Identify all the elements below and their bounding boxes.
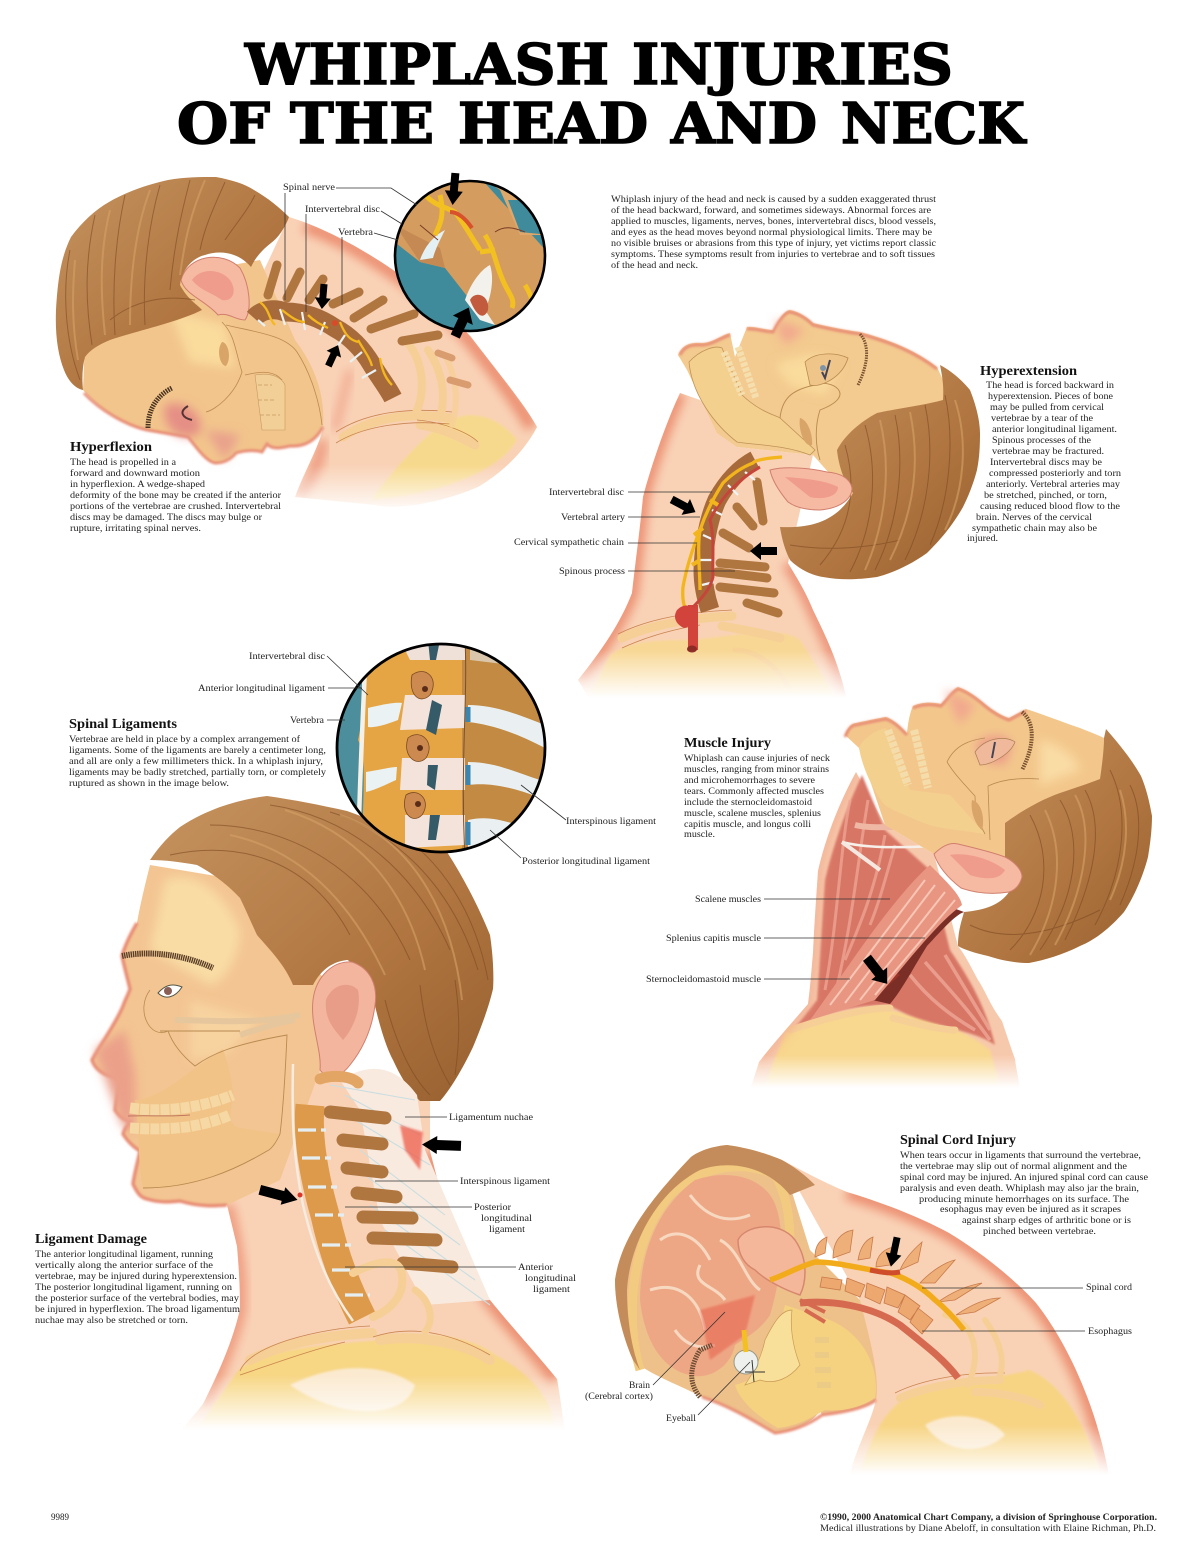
labels: spinal ligaments: Intervertebral disc bbox=[249, 651, 325, 662]
text block: ligament damage: vertebrae, may be injured during hyperextension. bbox=[35, 1271, 237, 1282]
title bbox=[177, 32, 1027, 157]
text block: hyperflexion: deformity of the bone may be created if the anterior bbox=[70, 490, 282, 501]
text block: muscle injury: and microhemorrhages to severe bbox=[684, 775, 815, 786]
labels: ligament damage bbox=[449, 1112, 576, 1295]
text block: hyperflexion: rupture, irritating spinal nerves. bbox=[70, 523, 201, 534]
heading: spinal ligaments: Spinal Ligaments bbox=[69, 716, 177, 731]
copyright credit bbox=[820, 1512, 1157, 1534]
labels: hyperflexion: Spinal nerve bbox=[283, 182, 335, 193]
skull lines bbox=[206, 322, 322, 425]
arrows bbox=[667, 491, 700, 520]
leader lines: muscle injury bbox=[764, 899, 925, 979]
eye and brow bbox=[158, 985, 182, 997]
text block: hyperextension: The head is forced backward in bbox=[986, 380, 1114, 391]
panel: spinal cord injury illustration bbox=[615, 1145, 1109, 1475]
text block: introduction: of the head and neck. bbox=[611, 260, 698, 271]
text block: hyperextension: injured. bbox=[967, 533, 998, 544]
face skin and skull bbox=[92, 865, 350, 1206]
labels: ligament damage: ligament bbox=[489, 1224, 525, 1235]
labels: ligament damage: Anterior bbox=[518, 1262, 554, 1273]
text block: hyperextension: anterior longitudinal ligament. bbox=[992, 424, 1117, 435]
text block: spinal cord injury: the vertebrae may slip out of normal alignment and the bbox=[900, 1161, 1127, 1172]
ear bbox=[934, 843, 1022, 893]
text block: hyperflexion: The head is propelled in a bbox=[70, 457, 177, 468]
ear bbox=[181, 257, 249, 320]
text block: hyperextension: compressed posteriorly and torn bbox=[989, 468, 1121, 479]
text block: spinal ligaments: ruptured as shown in the image below. bbox=[69, 778, 229, 789]
panel: hyperflexion illustration bbox=[56, 170, 550, 507]
labels: spinal cord injury: (Cerebral cortex) bbox=[585, 1391, 653, 1402]
neck and chest skin bbox=[180, 1060, 565, 1432]
heading: muscle injury: Muscle Injury bbox=[684, 735, 771, 750]
text block: hyperextension: anteriorly. Vertebral arteries may bbox=[986, 479, 1120, 490]
vertebrae column bbox=[717, 482, 778, 613]
labels: spinal ligaments: Interspinous ligament bbox=[566, 816, 656, 827]
leader lines: hyperextension bbox=[628, 492, 735, 571]
labels: hyperextension: Intervertebral disc bbox=[549, 487, 624, 498]
text block: hyperextension: causing reduced blood flow to the bbox=[980, 501, 1120, 512]
catalog number: 9989 bbox=[51, 1512, 69, 1523]
magnified inset bbox=[337, 640, 552, 860]
head skin bbox=[678, 310, 950, 500]
arrows bbox=[422, 1135, 461, 1155]
magnified inset bbox=[394, 180, 546, 332]
labels: ligament damage: longitudinal bbox=[481, 1213, 532, 1224]
eye bbox=[805, 354, 848, 386]
text block: hyperflexion: forward and downward motion bbox=[70, 468, 200, 479]
text block: spinal ligaments: and all are only a few millimeters thick. In a whiplash injury, bbox=[69, 756, 323, 767]
text block: spinal cord injury: against sharp edges of arthritic bone or is bbox=[962, 1215, 1131, 1226]
hair bbox=[958, 729, 1152, 963]
labels: spinal cord injury: Eyeball bbox=[666, 1413, 696, 1424]
vertebrae column bbox=[330, 1112, 452, 1267]
text block: hyperflexion: portions of the vertebrae are crushed. Intervertebral bbox=[70, 501, 281, 512]
title: HEAD bbox=[458, 91, 648, 157]
labels: ligament damage: Posterior bbox=[474, 1202, 512, 1213]
eyeball bbox=[734, 1330, 765, 1382]
labels: ligament damage: longitudinal bbox=[525, 1273, 576, 1284]
text block: hyperextension: may be pulled from cervical bbox=[990, 402, 1104, 413]
text block: spinal ligaments bbox=[69, 734, 326, 789]
labels: muscle injury: Scalene muscles bbox=[695, 894, 761, 905]
leader lines: ligament damage bbox=[345, 1117, 516, 1267]
text block: muscle injury: capitis muscle, and longus colli bbox=[684, 819, 811, 830]
spinal cord bbox=[770, 1262, 964, 1330]
labels: spinal cord injury: Brain bbox=[629, 1380, 650, 1391]
text block: ligament damage: The anterior longitudinal ligament, running bbox=[35, 1249, 213, 1260]
title: THE bbox=[290, 91, 434, 157]
text block: spinal cord injury: paralysis and even death. Whiplash may also jar the brain, bbox=[900, 1183, 1139, 1194]
text block: hyperflexion: in hyperflexion. A wedge-shaped bbox=[70, 479, 205, 490]
text block: introduction: applied to muscles, ligaments, nerves, bones, intervertebral discs, blood vessels, bbox=[611, 216, 936, 227]
heading: spinal cord injury: Spinal Cord Injury bbox=[900, 1132, 1016, 1147]
text block: muscle injury bbox=[684, 753, 830, 840]
title: AND bbox=[670, 91, 817, 157]
text block: muscle injury: tears. Commonly affected muscles bbox=[684, 786, 824, 797]
neck and chest bbox=[750, 772, 1020, 1090]
labels: muscle injury: Sternocleidomastoid muscle bbox=[646, 974, 761, 985]
text block: spinal ligaments: ligaments may be badly stretched, partially torn, or completely bbox=[69, 767, 326, 778]
text block: spinal cord injury: When tears occur in ligaments that surround the vertebrae, bbox=[900, 1150, 1141, 1161]
leader lines: spinal ligaments bbox=[327, 656, 566, 858]
text block: hyperextension bbox=[967, 380, 1121, 544]
labels: ligament damage: Interspinous ligament bbox=[460, 1176, 550, 1187]
text block: spinal cord injury: spinal cord may be injured. An injured spinal cord can cause bbox=[900, 1172, 1148, 1183]
text block: ligament damage: nuchae may also be stretched or torn. bbox=[35, 1315, 188, 1326]
text block: muscle injury: muscle, scalene muscles, splenius bbox=[684, 808, 821, 819]
text block: introduction: of the head backward, forward, and sometimes sideways. Abnormal forces are bbox=[611, 205, 931, 216]
text block: hyperextension: brain. Nerves of the cervical bbox=[976, 512, 1092, 523]
labels: hyperflexion: Vertebra bbox=[338, 227, 374, 238]
text block: hyperflexion bbox=[70, 457, 282, 534]
vertebral bodies bbox=[820, 1277, 933, 1334]
text block: ligament damage: vertically along the anterior surface of the bbox=[35, 1260, 213, 1271]
jaw and teeth bbox=[689, 347, 815, 455]
text block: introduction: and eyes as the head moves beyond normal physiological limits. There may be bbox=[611, 227, 932, 238]
labels: spinal ligaments: Vertebra bbox=[290, 715, 325, 726]
title: WHIPLASH bbox=[244, 32, 609, 98]
arrow bbox=[859, 952, 895, 990]
hair bbox=[780, 365, 980, 579]
panel: muscle injury illustration bbox=[750, 687, 1152, 1090]
labels: spinal cord injury bbox=[585, 1282, 1132, 1424]
jaw and teeth bbox=[859, 728, 985, 834]
arrows bbox=[444, 172, 464, 206]
text block: muscle injury: muscles, ranging from minor strains bbox=[684, 764, 829, 775]
cervical vertebrae bbox=[268, 265, 438, 341]
text block: spinal cord injury: esophagus may even be injured as it scrapes bbox=[940, 1204, 1121, 1215]
panel: ligament damage illustration bbox=[92, 640, 565, 1432]
hair bbox=[615, 1145, 815, 1370]
labels: spinal ligaments: Posterior longitudinal ligament bbox=[522, 856, 650, 867]
brain bbox=[640, 1175, 781, 1376]
labels: ligament damage: Ligamentum nuchae bbox=[449, 1112, 533, 1123]
text block: muscle injury: muscle. bbox=[684, 829, 715, 840]
labels: hyperflexion bbox=[283, 182, 380, 238]
labels: muscle injury: Splenius capitis muscle bbox=[666, 933, 761, 944]
text block: ligament damage: The posterior longitudinal ligament, running on bbox=[35, 1282, 232, 1293]
text block: hyperflexion: discs may be damaged. The discs may bulge or bbox=[70, 512, 263, 523]
leader lines: hyperflexion bbox=[285, 188, 417, 312]
esophagus bbox=[800, 1300, 958, 1378]
arrow bbox=[883, 1236, 905, 1268]
labels: spinal ligaments: Anterior longitudinal ligament bbox=[198, 683, 325, 694]
hair bbox=[150, 796, 493, 1101]
labels: ligament damage: ligament bbox=[533, 1284, 570, 1295]
text block: introduction: no visible bruises or abrasions from this type of injury, yet victims report classic bbox=[611, 238, 936, 249]
text block: spinal ligaments: Vertebrae are held in place by a complex arrangement of bbox=[69, 734, 301, 745]
title: OF bbox=[177, 91, 270, 157]
labels: muscle injury bbox=[646, 894, 761, 985]
ear bbox=[313, 962, 376, 1076]
ligamentum nuchae bbox=[340, 1069, 490, 1305]
labels: hyperflexion: Intervertebral disc bbox=[305, 204, 380, 215]
labels: spinal cord injury: Esophagus bbox=[1088, 1326, 1132, 1337]
head skin bbox=[83, 260, 323, 463]
title: NECK bbox=[841, 91, 1027, 157]
text block: spinal cord injury bbox=[900, 1150, 1148, 1237]
labels: spinal ligaments bbox=[198, 651, 656, 867]
text block: introduction: Whiplash injury of the head and neck is caused by a sudden exaggerated thrust bbox=[611, 194, 936, 205]
text block: introduction bbox=[611, 194, 936, 271]
heading: hyperflexion: Hyperflexion bbox=[70, 439, 153, 454]
head base bbox=[615, 1145, 877, 1433]
text block: hyperextension: hyperextension. Pieces of bone bbox=[988, 391, 1113, 402]
text block: hyperextension: Spinous processes of the bbox=[992, 435, 1091, 446]
head skin bbox=[845, 687, 1110, 885]
hair bbox=[56, 177, 289, 390]
face skull bbox=[735, 1305, 876, 1428]
ear bbox=[770, 468, 852, 510]
text block: hyperextension: vertebrae by a tear of the bbox=[991, 413, 1093, 424]
spinous processes bbox=[815, 1230, 1000, 1315]
text block: muscle injury: Whiplash can cause injuries of neck bbox=[684, 753, 830, 764]
text block: hyperextension: Intervertebral discs may be bbox=[990, 457, 1102, 468]
jaw and teeth bbox=[135, 1049, 280, 1188]
title: INJURIES bbox=[632, 32, 953, 98]
eyebrow bbox=[148, 388, 172, 428]
heading: ligament damage: Ligament Damage bbox=[35, 1231, 147, 1246]
text block: hyperextension: vertebrae may be fractured. bbox=[992, 446, 1104, 457]
text block: spinal ligaments: ligaments. Some of the ligaments are barely a centimeter long, bbox=[69, 745, 326, 756]
ear bbox=[738, 1227, 805, 1295]
text block: ligament damage bbox=[35, 1249, 241, 1326]
text block: ligament damage: the posterior surface of the vertebral bodies, may bbox=[35, 1293, 239, 1304]
panel: hyperextension illustration bbox=[578, 310, 980, 700]
labels: hyperextension: Cervical sympathetic chain bbox=[514, 537, 624, 548]
leader lines: spinal cord injury bbox=[653, 1288, 1085, 1415]
skull band bbox=[632, 1167, 790, 1370]
eye bbox=[975, 738, 1015, 765]
copyright credit: ©1990, 2000 Anatomical Chart Company, a division of Springhouse Corporation. bbox=[820, 1512, 1157, 1523]
text block: hyperextension: sympathetic chain may also be bbox=[972, 523, 1097, 534]
labels: hyperextension: Vertebral artery bbox=[561, 512, 625, 523]
text block: ligament damage: be injured in hyperflexion. The broad ligamentum bbox=[35, 1304, 241, 1315]
text block: introduction: symptoms. These symptoms result from injuries to vertebrae and to soft tissues bbox=[611, 249, 935, 260]
copyright credit: Medical illustrations by Diane Abeloff, in consultation with Elaine Richman, Ph.D. bbox=[820, 1523, 1156, 1534]
neck and chest skin bbox=[578, 393, 847, 700]
neck and shoulder skin bbox=[250, 217, 537, 507]
heading: hyperextension: Hyperextension bbox=[980, 363, 1078, 378]
text block: spinal cord injury: pinched between vertebrae. bbox=[983, 1226, 1096, 1237]
text block: muscle injury: include the sternocleidomastoid bbox=[684, 797, 812, 808]
text block: spinal cord injury: producing minute hemorrhages on its surface. The bbox=[919, 1194, 1129, 1205]
labels: hyperextension bbox=[514, 487, 625, 577]
neck and shoulder skin bbox=[782, 1160, 1109, 1475]
labels: spinal cord injury: Spinal cord bbox=[1086, 1282, 1132, 1293]
text block: hyperextension: be stretched, pinched, or torn, bbox=[984, 490, 1107, 501]
labels: hyperextension: Spinous process bbox=[559, 566, 625, 577]
